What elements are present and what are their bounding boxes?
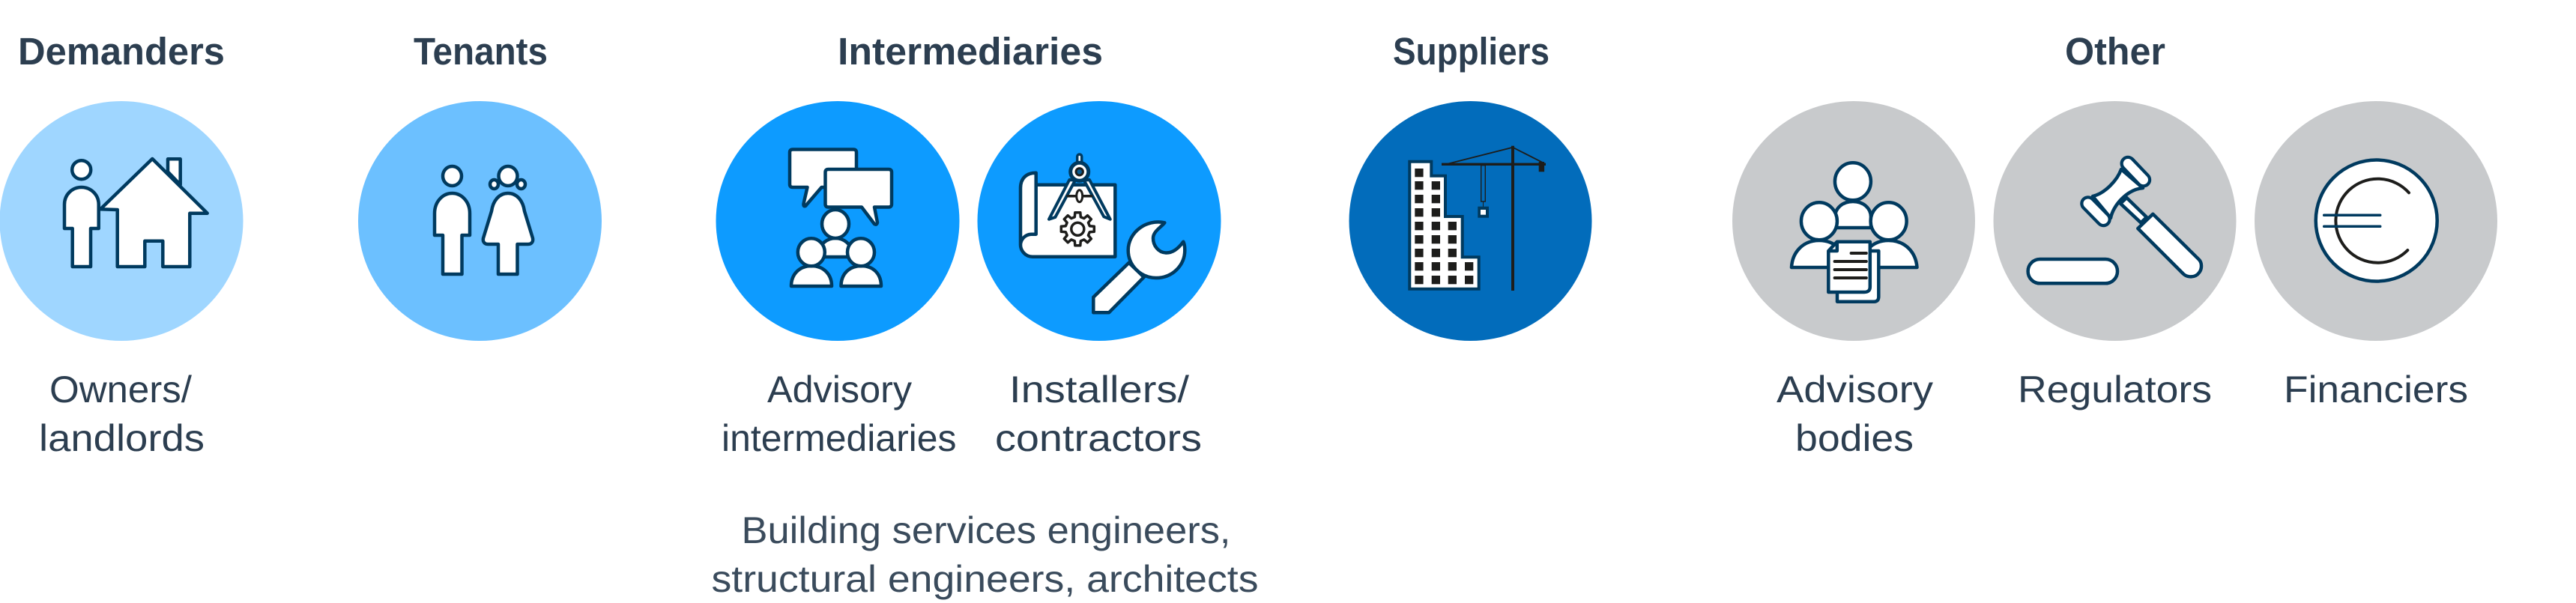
blueprint sheet	[1021, 173, 1115, 257]
wrench	[1093, 222, 1185, 312]
heading: Other: Other	[2065, 30, 2165, 73]
label: Owners/ landlords: Owners/	[49, 369, 192, 410]
icon: speech bubbles and people	[790, 150, 892, 286]
icon: blueprint, compass, gear and wrench	[1021, 154, 1185, 312]
label: Advisory intermediaries: Advisory	[767, 369, 912, 410]
panel: suppliers	[1349, 30, 1591, 341]
label: Advisory intermediaries: intermediaries	[722, 417, 956, 459]
heading: Intermediaries: Intermediaries	[838, 30, 1103, 73]
building	[1409, 162, 1479, 289]
label: Regulators: Regulators	[2018, 369, 2212, 410]
label: Owners/ landlords	[39, 369, 205, 459]
circle: advisory bodies	[1732, 101, 1975, 341]
text: intermediary examples	[712, 509, 1259, 600]
icon: gavel	[2028, 163, 2201, 283]
icon: building and crane	[1409, 146, 1546, 291]
compass	[1049, 154, 1110, 219]
label: Installers/ contractors	[995, 369, 1202, 459]
icon: euro coin	[2316, 160, 2437, 282]
label: Installers/ contractors: contractors	[995, 417, 1202, 459]
circle: installers	[977, 101, 1221, 341]
windows	[1415, 169, 1473, 284]
panel: intermediaries	[712, 30, 1259, 600]
label: Advisory bodies: Advisory	[1777, 369, 1933, 410]
panel: other	[1732, 30, 2497, 459]
panel: tenants	[358, 30, 602, 341]
circle: suppliers	[1349, 101, 1591, 341]
heading: Demanders: Demanders	[18, 30, 225, 73]
icon: man and woman	[435, 166, 533, 274]
label: Owners/ landlords: landlords	[39, 417, 205, 459]
circle: advisory intermediaries	[716, 101, 959, 341]
circle: regulators	[1993, 101, 2236, 341]
text: intermediary examples: Building services engineers,	[742, 509, 1230, 551]
gear	[1061, 213, 1094, 246]
heading: Suppliers: Suppliers	[1393, 30, 1549, 73]
text: intermediary examples: structural engineers, architects	[712, 558, 1259, 600]
label: Advisory intermediaries	[722, 369, 956, 459]
crane	[1442, 146, 1546, 291]
label: Installers/ contractors: Installers/	[1009, 369, 1189, 410]
panel: demanders	[0, 30, 243, 459]
circle: financiers	[2255, 101, 2497, 341]
icon: person and house	[64, 159, 208, 267]
heading: Tenants: Tenants	[414, 30, 548, 73]
icon: people with documents	[1792, 163, 1917, 302]
label: Advisory bodies	[1777, 369, 1933, 459]
circle: tenants	[358, 101, 602, 341]
circle: owners	[0, 101, 243, 341]
label: Financiers: Financiers	[2284, 369, 2468, 410]
label: Advisory bodies: bodies	[1795, 417, 1914, 459]
